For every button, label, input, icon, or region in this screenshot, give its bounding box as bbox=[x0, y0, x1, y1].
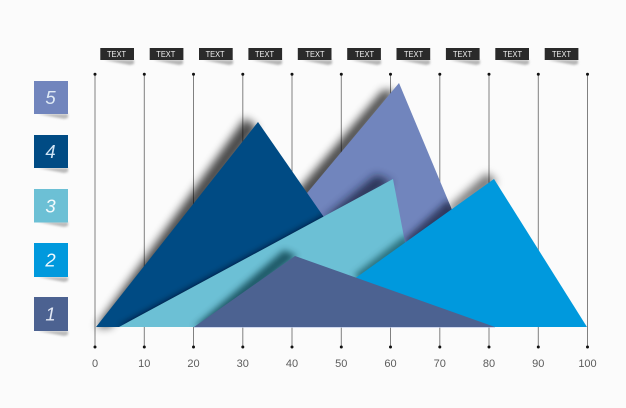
legend item 2: 2 bbox=[44, 250, 56, 270]
x axis labels: 70 bbox=[434, 358, 446, 370]
x axis labels: 100 bbox=[578, 358, 597, 370]
triangle 2 bbox=[352, 169, 587, 327]
triangle 4 bbox=[96, 118, 400, 327]
legend item 5: 5 bbox=[45, 87, 56, 108]
x axis labels: 90 bbox=[532, 358, 544, 370]
triangle 5 bbox=[195, 83, 501, 327]
triangle 3 bbox=[119, 175, 421, 327]
x axis labels: 30 bbox=[237, 358, 249, 370]
legend item 5 bbox=[34, 81, 68, 119]
legend item 4: 4 bbox=[45, 141, 56, 162]
legend item 1 bbox=[34, 297, 68, 336]
x axis labels: 80 bbox=[483, 358, 495, 370]
baseline highlight bbox=[194, 326, 495, 329]
header labels: TEXT bbox=[355, 49, 374, 59]
header labels bbox=[100, 48, 578, 65]
legend bbox=[34, 81, 68, 336]
x axis labels: 40 bbox=[286, 358, 298, 370]
grid dots bbox=[94, 73, 589, 349]
legend item 3 bbox=[34, 189, 68, 227]
legend item 2 bbox=[34, 243, 68, 282]
header labels: TEXT bbox=[404, 49, 423, 59]
triangle 1 bbox=[194, 250, 495, 327]
x axis labels: 10 bbox=[138, 358, 150, 370]
header labels: TEXT bbox=[156, 49, 175, 59]
x axis labels: 0 bbox=[92, 358, 98, 370]
header labels: TEXT bbox=[306, 49, 324, 59]
x axis labels: 20 bbox=[187, 358, 200, 370]
header labels: TEXT bbox=[255, 49, 274, 59]
header labels: TEXT bbox=[206, 49, 225, 59]
header labels: TEXT bbox=[503, 49, 522, 59]
legend item 3: 3 bbox=[45, 196, 56, 216]
header labels: TEXT bbox=[107, 49, 126, 59]
header labels: TEXT bbox=[453, 49, 472, 59]
x axis labels bbox=[92, 358, 597, 370]
x axis labels: 60 bbox=[384, 358, 397, 370]
header labels: TEXT bbox=[552, 49, 571, 59]
legend item 4 bbox=[34, 135, 68, 173]
legend item 1: 1 bbox=[45, 304, 56, 324]
grid lines bbox=[95, 74, 588, 347]
x axis labels: 50 bbox=[335, 358, 347, 370]
